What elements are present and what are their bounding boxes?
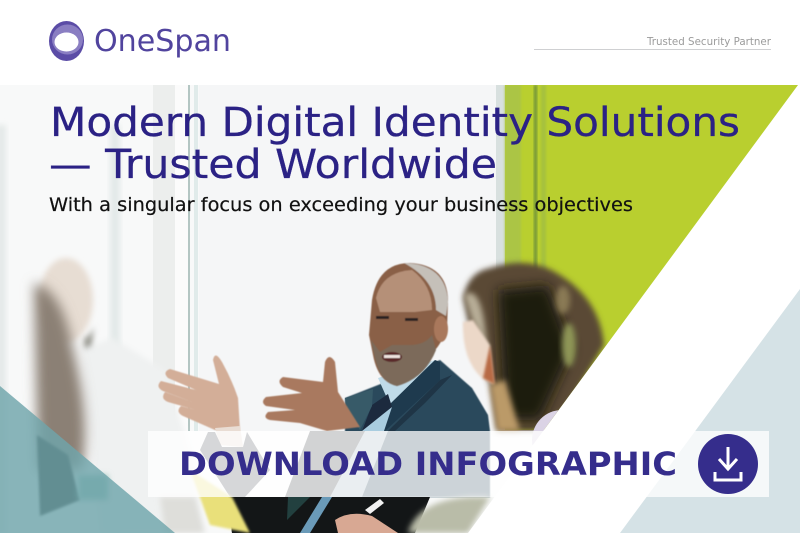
man head	[369, 263, 448, 386]
sleeves through band	[200, 431, 388, 497]
title: Modern Digital Identity Solutions	[50, 100, 740, 146]
tagline: Trusted Security Partner	[646, 36, 772, 48]
man left hand	[158, 355, 240, 430]
green panel	[505, 85, 800, 430]
left blurred man	[40, 256, 182, 520]
logo	[49, 21, 231, 61]
subtitle: With a singular focus on exceeding your business objectives	[49, 194, 633, 216]
man right hand	[263, 357, 360, 431]
table items	[160, 470, 490, 533]
lavender circle	[532, 410, 558, 445]
download band	[148, 431, 769, 497]
teal triangle	[0, 386, 175, 533]
title: — Trusted Worldwide	[49, 142, 497, 188]
man left cuff	[215, 426, 243, 447]
logo mark	[49, 21, 84, 61]
man suit	[228, 360, 490, 533]
download label: DOWNLOAD INFOGRAPHIC	[179, 445, 677, 483]
light blue triangle	[620, 289, 800, 533]
header rule	[534, 49, 771, 50]
logo wordmark: OneSpan	[94, 24, 231, 59]
woman hair and face	[463, 263, 604, 431]
left blurred woman	[34, 283, 108, 516]
window stripes	[0, 85, 506, 533]
icon: download button	[698, 434, 758, 494]
title	[49, 100, 740, 188]
